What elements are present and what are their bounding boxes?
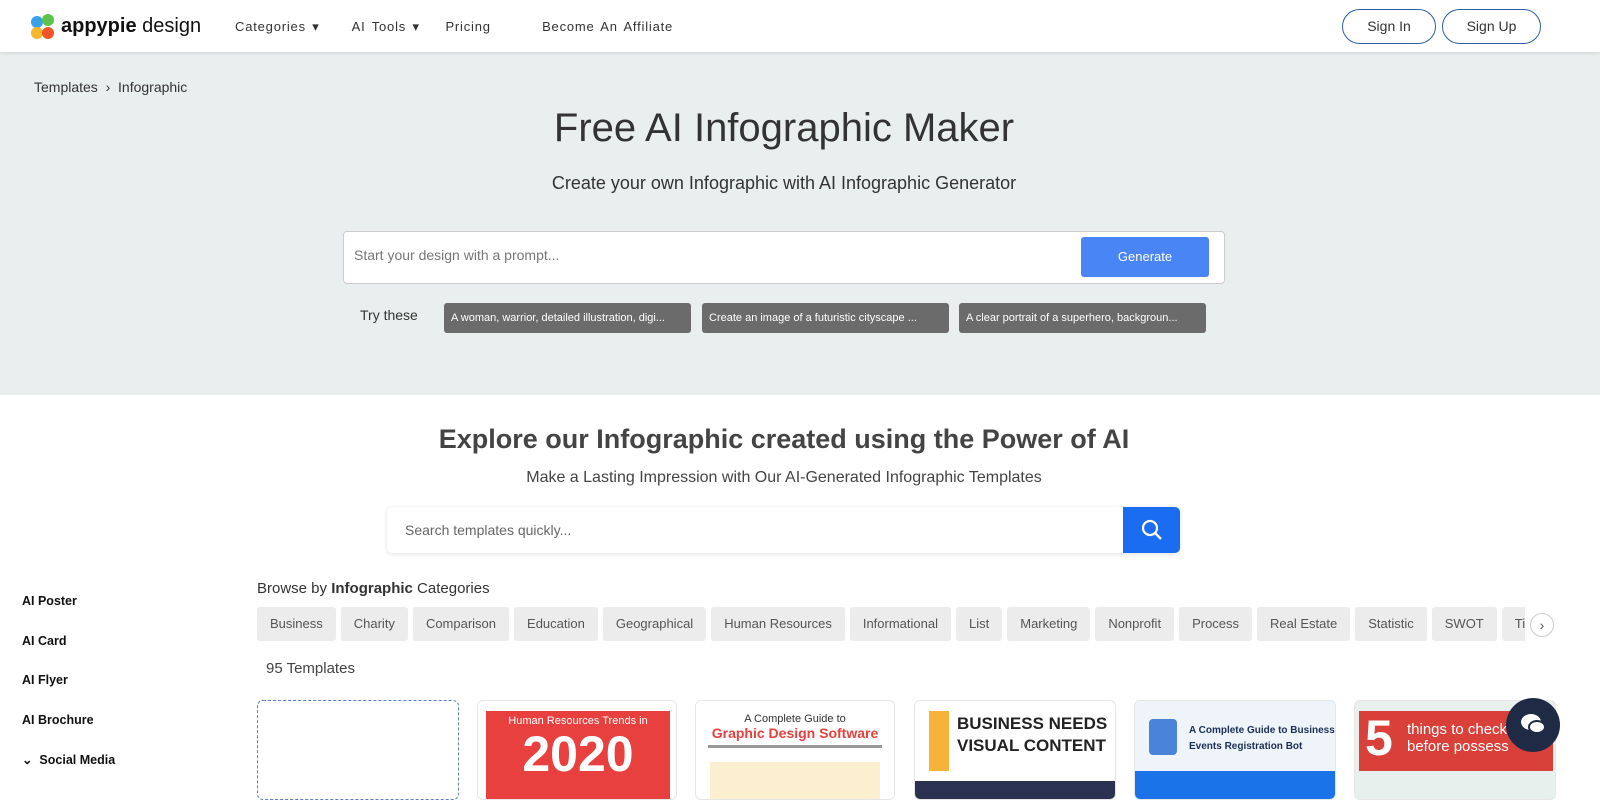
category chips: SWOT <box>1445 616 1484 631</box>
sign in: Sign In <box>1367 18 1411 34</box>
next arrow: › <box>1540 617 1544 633</box>
category chips: List <box>969 616 989 631</box>
sidebar <box>22 594 116 767</box>
category chips: Geographical <box>616 616 693 631</box>
text: A Complete Guide to Business <box>1189 725 1335 736</box>
section heading: Explore our Infographic created using the Power of AI <box>439 424 1129 454</box>
sidebar: AI Flyer <box>22 673 68 687</box>
text: Events Registration Bot <box>1189 741 1302 752</box>
text: A woman, warrior, detailed illustration, digi... <box>451 312 665 324</box>
sign in <box>1342 9 1436 44</box>
category chips: Statistic <box>1368 616 1414 631</box>
text: 2020 <box>522 726 634 782</box>
category chips: Process <box>1192 616 1239 631</box>
sidebar: AI Brochure <box>22 713 94 727</box>
search button <box>1123 507 1180 553</box>
sidebar: ⌄ Social Media <box>22 753 115 767</box>
header <box>0 0 1600 52</box>
text: things to check <box>1407 721 1507 738</box>
browse label: Browse by Infographic Categories <box>257 580 490 597</box>
text: 5 <box>1365 710 1393 766</box>
subtitle: Create your own Infographic with AI Infographic Generator <box>552 173 1016 193</box>
text: before possess <box>1407 738 1509 755</box>
category chips: Nonprofit <box>1108 616 1161 631</box>
category chips: Human Resources <box>724 616 832 631</box>
generate button: Generate <box>1118 249 1172 264</box>
search bar: Search templates quickly... <box>405 522 571 538</box>
category chips: Education <box>527 616 585 631</box>
sign up <box>1442 9 1541 44</box>
text: BUSINESS NEEDS <box>957 714 1107 733</box>
category chips: Real Estate <box>1270 616 1337 631</box>
category chips: Comparison <box>426 616 496 631</box>
text: VISUAL CONTENT <box>957 736 1106 755</box>
hero <box>0 52 1600 395</box>
prompt box <box>343 231 1225 284</box>
try these: Try these <box>360 307 418 323</box>
text: Human Resources Trends in <box>508 715 648 727</box>
sidebar: AI Card <box>22 634 66 648</box>
category chips <box>257 607 1525 641</box>
sidebar: AI Poster <box>22 594 77 608</box>
category chips: Informational <box>863 616 938 631</box>
sign up: Sign Up <box>1467 18 1516 34</box>
text: Graphic Design Software <box>712 725 878 741</box>
breadcrumb: Templates › Infographic <box>34 79 187 95</box>
category chips: Marketing <box>1020 616 1077 631</box>
logo: appypie design <box>61 15 201 37</box>
generate button <box>1081 237 1209 277</box>
section subheading: Make a Lasting Impression with Our AI-Generated Infographic Templates <box>526 469 1042 486</box>
nav: Categories ▾ AI Tools ▾ Pricing Become An Affiliate <box>235 19 673 34</box>
search bar <box>387 507 1180 553</box>
category chips: Business <box>270 616 323 631</box>
title: Free AI Infographic Maker <box>554 106 1014 150</box>
category chips: Charity <box>354 616 395 631</box>
text: A clear portrait of a superhero, backgroun... <box>966 312 1178 324</box>
next arrow <box>1530 613 1554 637</box>
text: A Complete Guide to <box>744 713 846 725</box>
suggestion chips <box>444 9 1535 333</box>
template count: 95 Templates <box>266 660 355 677</box>
chat button <box>1506 698 1560 752</box>
prompt box: Start your design with a prompt... <box>354 247 559 263</box>
text: Create an image of a futuristic cityscape ... <box>709 312 917 324</box>
